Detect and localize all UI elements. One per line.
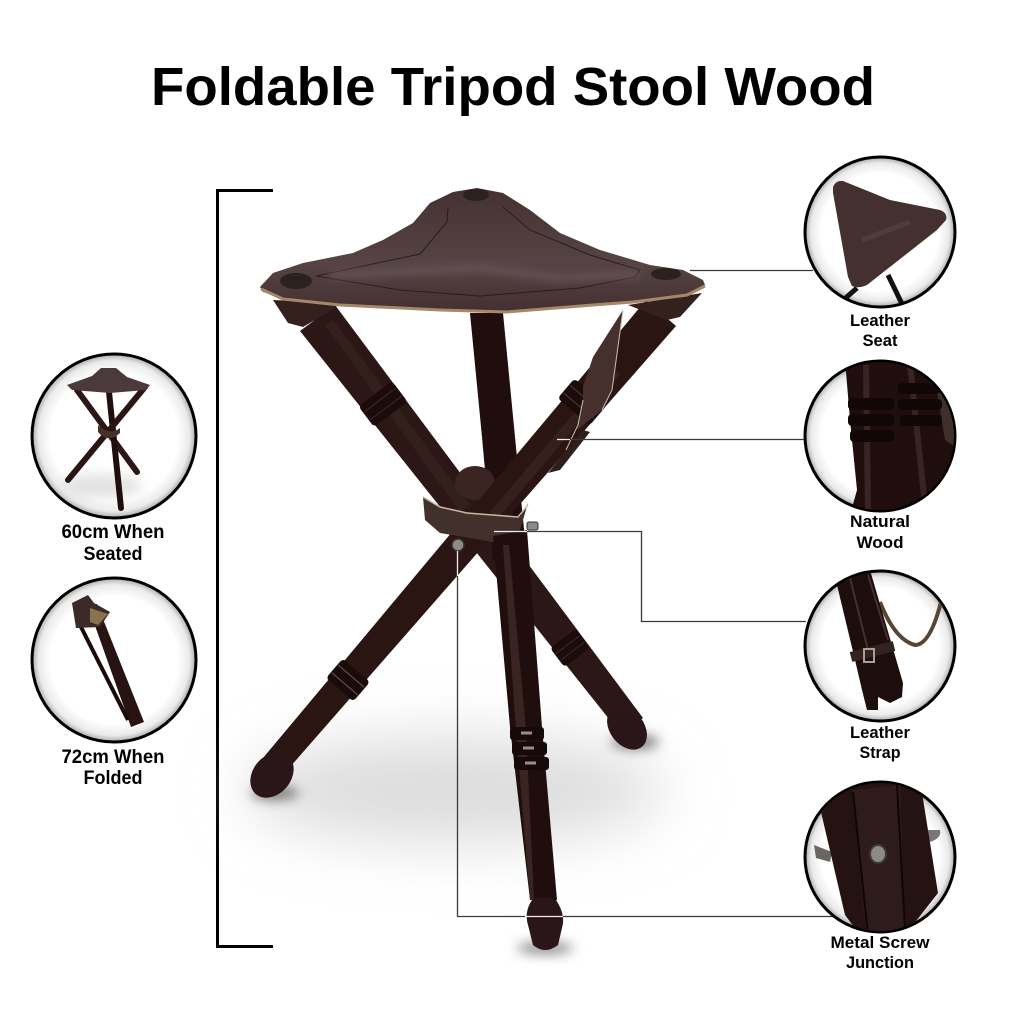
label: natural wood: Wood: [856, 534, 904, 552]
height bracket: [218, 190, 273, 946]
label: natural wood: [850, 513, 910, 552]
label: leather strap: Strap: [860, 744, 900, 762]
label: folded height: Folded: [84, 768, 142, 789]
floor shadow: [245, 735, 665, 954]
label: leather seat: [850, 312, 911, 350]
title: Foldable Tripod Stool Wood: [151, 57, 875, 117]
back leg: [300, 305, 655, 757]
detail: leather strap: [805, 570, 955, 721]
label: leather seat: Seat: [862, 332, 898, 350]
detail: seated height: [32, 354, 196, 518]
main stool photo: [241, 188, 705, 954]
label: folded height: [62, 747, 164, 789]
label: natural wood: Natural: [850, 513, 910, 531]
label: seated height: Seated: [84, 544, 142, 565]
label: seated height: [62, 522, 164, 565]
leather seat: [260, 188, 705, 312]
label: metal screw junction: Junction: [846, 954, 914, 972]
detail: folded height: [32, 578, 196, 742]
label: leather strap: Leather: [850, 724, 911, 742]
label: seated height: 60cm When: [62, 522, 164, 543]
label: leather strap: [850, 724, 911, 762]
label: leather seat: Leather: [850, 312, 911, 330]
connector lines: [458, 270, 833, 916]
label: folded height: 72cm When: [62, 747, 164, 768]
label: metal screw junction: [830, 934, 930, 972]
seat sockets: [273, 293, 702, 327]
front diagonal leg: [241, 300, 676, 806]
detail: leather seat: [805, 157, 955, 307]
leather band: [423, 497, 528, 542]
detail: natural wood: [805, 360, 960, 515]
centre leg upper: [470, 313, 527, 560]
hanging leather strap: [548, 310, 623, 473]
metal screws: [452, 522, 538, 551]
label: metal screw junction: Metal Screw: [830, 934, 930, 952]
detail: metal screw junction: [805, 780, 955, 935]
infographic canvas: [30, 66, 956, 968]
strap loop back: [455, 466, 495, 500]
centre leg lower: [493, 530, 563, 950]
